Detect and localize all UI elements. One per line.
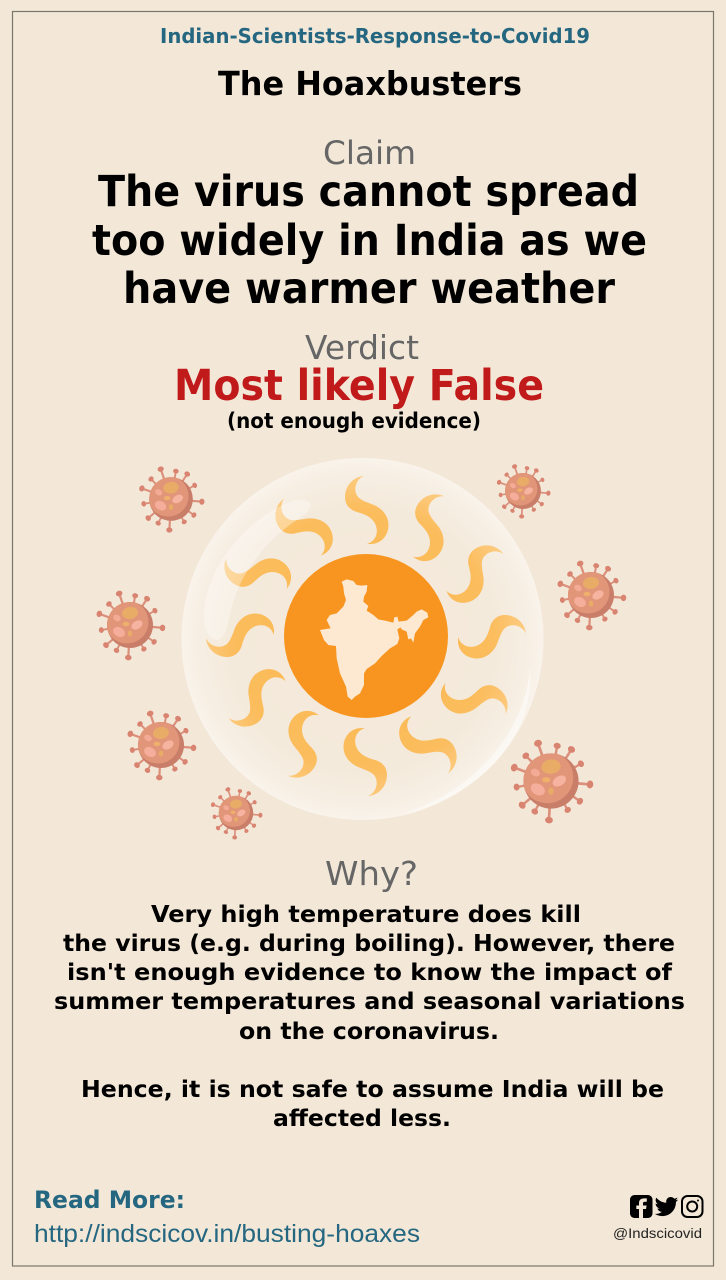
icon: twitter: [655, 1197, 678, 1216]
claim text: [92, 168, 647, 314]
explanation text: on the coronavirus.: [239, 1017, 499, 1045]
explanation text: [54, 900, 685, 1132]
read more heading: Read More:: [34, 1186, 185, 1214]
claim label: Claim: [323, 134, 416, 172]
icon: facebook: [630, 1195, 652, 1218]
icon: sun disc: [284, 554, 448, 718]
claim text: The virus cannot spread: [98, 168, 639, 217]
icon: heat swirls: [206, 476, 526, 796]
explanation text: Very high temperature does kill: [151, 900, 581, 928]
illustration: India in bubble with heat and viruses: [96, 458, 627, 840]
explanation text: isn't enough evidence to know the impact of: [67, 958, 673, 986]
explanation text: the virus (e.g. during boiling). However, there: [63, 929, 675, 957]
explanation text: summer temperatures and seasonal variations: [54, 987, 685, 1015]
link: http://indscicov.in/busting-hoaxes: [34, 1220, 420, 1248]
explanation text: Hence, it is not safe to assume India will be: [81, 1075, 664, 1103]
verdict: Most likely False: [174, 362, 544, 411]
claim text: have warmer weather: [123, 265, 615, 314]
social handle: @Indscicovid: [613, 1225, 702, 1241]
icon: viruses: [96, 464, 627, 840]
icon: India map: [320, 579, 428, 700]
title: The Hoaxbusters: [218, 65, 522, 103]
explanation text: affected less.: [273, 1104, 451, 1132]
icon: instagram: [682, 1196, 702, 1217]
verdict note: (not enough evidence): [227, 409, 481, 433]
header: project name: Indian-Scientists-Response-to-Covid19: [160, 24, 590, 48]
claim text: too widely in India as we: [92, 217, 647, 266]
verdict label: Verdict: [305, 328, 419, 367]
why heading: Why?: [325, 854, 418, 893]
icon: bubble: [182, 458, 544, 820]
